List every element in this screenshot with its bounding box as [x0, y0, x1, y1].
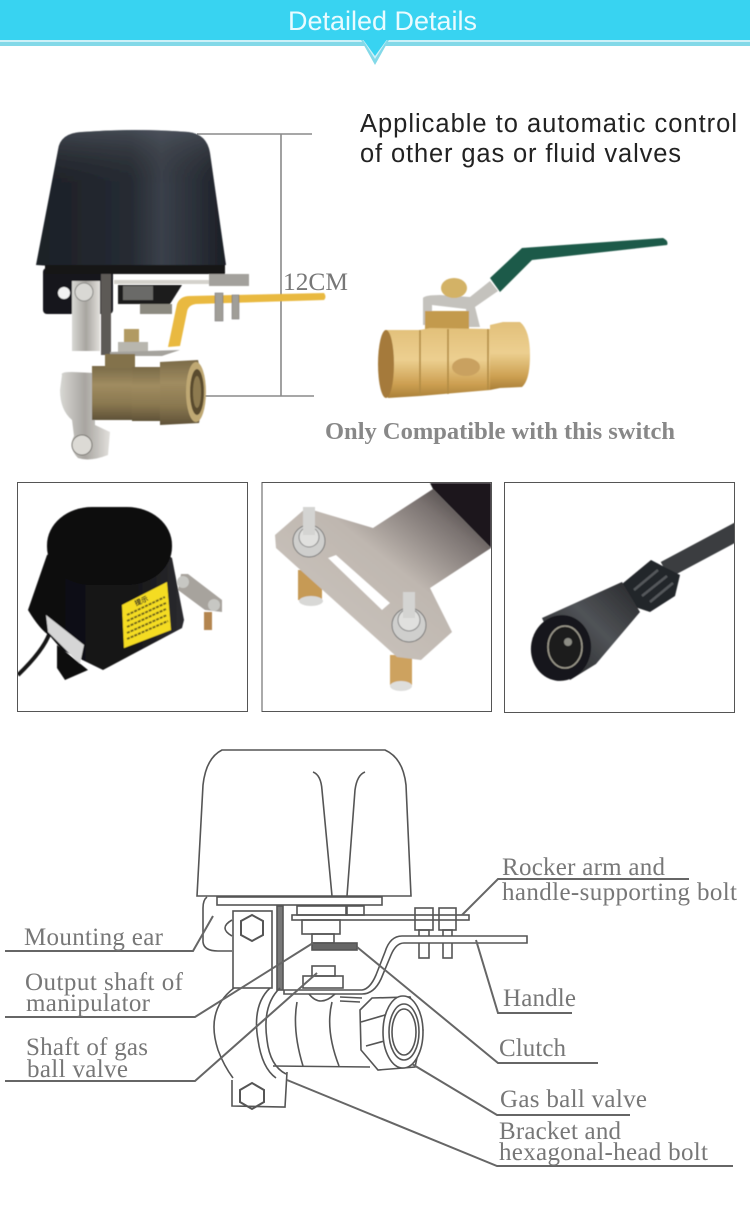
strain relief [622, 560, 680, 612]
compatibility caption: Only Compatible with this switch [325, 418, 675, 445]
barrel [542, 582, 640, 680]
rocker arm and motor block [114, 274, 249, 314]
callout: bracket and hexagonal-head bolt [287, 1080, 733, 1166]
handle bolts [215, 293, 239, 321]
valve stem bolt [110, 329, 180, 356]
banner title: Detailed Details [288, 6, 477, 36]
steel plate [275, 489, 491, 660]
callout: mounting ear [5, 916, 213, 951]
header banner [0, 0, 750, 65]
cable [665, 530, 740, 570]
connector face [530, 614, 592, 682]
warning label: 提示 [133, 594, 150, 608]
callout: clutch: Clutch [499, 1035, 566, 1062]
diagram: rocker arm and clutch [292, 906, 469, 950]
valve body [378, 322, 530, 398]
panel: rocker arm close-up [262, 482, 492, 712]
callout: rocker arm and handle-supporting bolt: Rocker arm and [502, 854, 666, 881]
actuator cap [36, 130, 226, 268]
callout: bracket and hexagonal-head bolt: Bracket and [499, 1118, 622, 1145]
yellow handle [168, 293, 326, 347]
stem cap [441, 278, 467, 298]
diagram: clamp and lower bolt [214, 988, 287, 1109]
callout: clutch [357, 947, 598, 1063]
12CM label: 12CM [283, 269, 348, 296]
diagram: gas ball valve [273, 966, 423, 1070]
callout: rocker arm and handle-supporting bolt: handle-supporting bolt [502, 879, 737, 906]
callout: output shaft of manipulator [5, 943, 313, 1017]
power cable [18, 632, 50, 675]
banner pointer arrow [361, 38, 389, 65]
description text [360, 110, 737, 168]
callout: bracket and hexagonal-head bolt: hexagonal-head bolt [499, 1139, 708, 1166]
white rating label [46, 615, 84, 664]
callout: output shaft of manipulator: Output shaft of [25, 969, 184, 996]
product photo: actuator mounted on valve [36, 130, 326, 459]
line diagram [197, 750, 527, 1109]
chrome clamp [60, 372, 110, 459]
diagram: handle bolts [415, 908, 456, 958]
callout: shaft of gas ball valve [5, 973, 317, 1083]
callout: handle [476, 940, 576, 1013]
callout: shaft of gas ball valve: ball valve [27, 1056, 128, 1083]
diagram: handle [284, 936, 527, 994]
plug [57, 645, 88, 680]
actuator body [27, 554, 185, 671]
callout: mounting ear: Mounting ear [24, 924, 164, 951]
panel: actuator photo [18, 482, 248, 712]
callout: gas ball valve [412, 1064, 647, 1115]
callout: rocker arm and handle-supporting bolt [462, 854, 737, 915]
callout: output shaft of manipulator: manipulator [26, 990, 151, 1017]
callout: handle: Handle [503, 985, 576, 1012]
description text: of other gas or fluid valves [360, 140, 681, 168]
dimension marker 12CM [197, 134, 348, 396]
description text: Applicable to automatic control [360, 110, 737, 138]
brass valve body [92, 354, 206, 425]
diagram: mounting ear and bracket [203, 897, 283, 990]
panel: DC power connector [504, 482, 740, 712]
bracket [177, 574, 222, 630]
bolt lower [392, 592, 426, 642]
photo: brass ball valve with green lever [378, 238, 668, 398]
dark actuator corner [430, 483, 491, 548]
silver arm [423, 281, 498, 327]
bolt upper [293, 507, 325, 557]
callout: shaft of gas ball valve: Shaft of gas [26, 1034, 148, 1061]
mounting bracket [43, 268, 113, 355]
callout: gas ball valve: Gas ball valve [500, 1086, 647, 1113]
warning label [122, 582, 171, 648]
brass pins [298, 570, 412, 691]
diagram: actuator cap outline [197, 750, 411, 905]
green lever [490, 238, 668, 292]
actuator top [47, 507, 172, 585]
